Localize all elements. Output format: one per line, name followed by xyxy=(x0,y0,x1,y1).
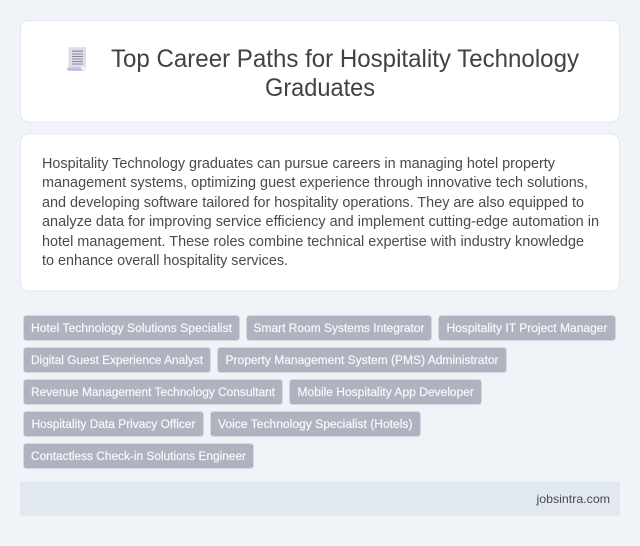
tag: Hospitality Data Privacy Officer xyxy=(24,412,204,436)
panel: description xyxy=(20,134,620,291)
tag: Smart Room Systems Integrator: Smart Room Systems Integrator xyxy=(254,321,424,335)
tag: Digital Guest Experience Analyst xyxy=(24,348,210,372)
tag: Contactless Check-in Solutions Engineer: Contactless Check-in Solutions Engineer xyxy=(31,449,246,463)
text block: description paragraph: and developing software tailored for hospitality operations. They are also equipped to xyxy=(42,195,584,211)
text block: description paragraph xyxy=(42,156,599,269)
footer bar xyxy=(20,482,620,516)
tag: Smart Room Systems Integrator xyxy=(246,316,432,340)
panel: header card xyxy=(20,20,620,122)
career tags xyxy=(24,316,616,468)
tag: Revenue Management Technology Consultant: Revenue Management Technology Consultant xyxy=(31,385,276,399)
tag: Hospitality IT Project Manager xyxy=(438,316,616,340)
tag: Contactless Check-in Solutions Engineer xyxy=(24,444,254,468)
tag: Voice Technology Specialist (Hotels) xyxy=(210,412,420,436)
text block: description paragraph: management systems, optimizing guest experience through innovative tech solutions, xyxy=(42,175,588,191)
tag: Property Management System (PMS) Administrator xyxy=(218,348,506,372)
tag: Digital Guest Experience Analyst: Digital Guest Experience Analyst xyxy=(31,353,204,367)
text block: description paragraph: hotel management. These roles combine technical expertise with industry knowledge xyxy=(42,234,584,250)
tag: Voice Technology Specialist (Hotels): Voice Technology Specialist (Hotels) xyxy=(218,417,412,431)
icon: paper scroll xyxy=(67,47,86,71)
tag: Mobile Hospitality App Developer xyxy=(290,380,482,404)
tag: Hotel Technology Solutions Specialist: Hotel Technology Solutions Specialist xyxy=(31,321,233,335)
text block: description paragraph: analyze data for improving service efficiency and implement cutting-edge automation in xyxy=(42,214,599,230)
tag: Hotel Technology Solutions Specialist xyxy=(24,316,240,340)
tag: Hospitality Data Privacy Officer: Hospitality Data Privacy Officer xyxy=(32,417,196,431)
tag: Hospitality IT Project Manager: Hospitality IT Project Manager xyxy=(446,321,608,335)
text block: description paragraph: to enhance overall hospitality services. xyxy=(42,253,288,269)
tag: Revenue Management Technology Consultant xyxy=(24,380,282,404)
text block: description paragraph: Hospitality Technology graduates can pursue careers in managing hotel property xyxy=(42,156,556,172)
tag: Mobile Hospitality App Developer: Mobile Hospitality App Developer xyxy=(298,385,474,399)
footer text: site name: jobsintra.com xyxy=(535,492,610,506)
title: Top Career Paths for Hospitality Technology xyxy=(111,45,579,73)
title: Graduates xyxy=(265,74,375,102)
tag: Property Management System (PMS) Administrator: Property Management System (PMS) Administrator xyxy=(226,353,498,367)
title xyxy=(111,45,579,102)
